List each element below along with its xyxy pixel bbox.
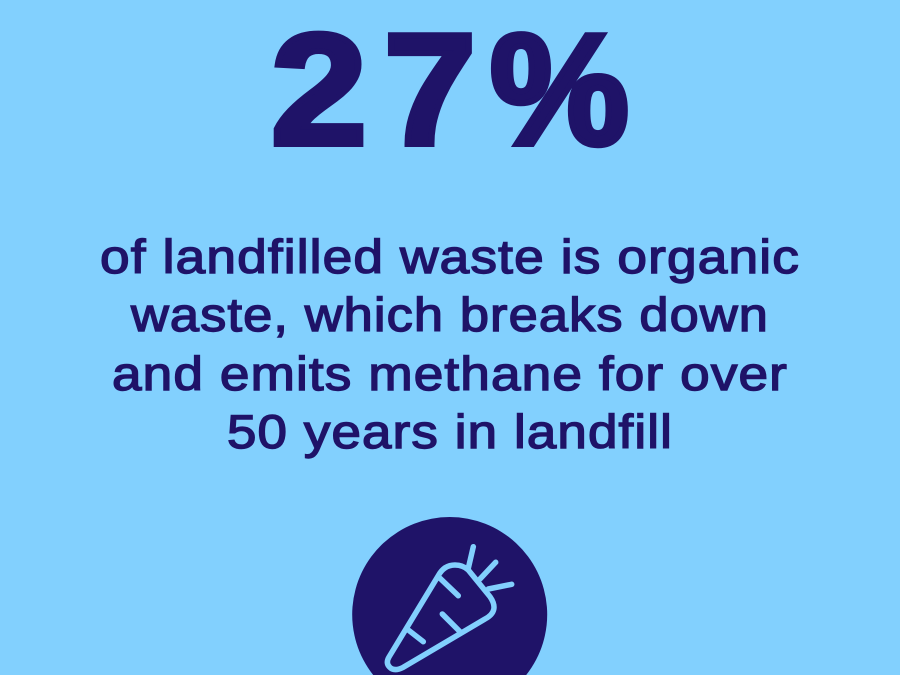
icon: carrot in circle (352, 517, 547, 675)
description text (100, 230, 800, 458)
big statistic: 27%: % (490, 2, 629, 178)
big statistic: 27%: 2 (271, 2, 367, 178)
description text: and emits methane for over (112, 347, 788, 400)
description text: of landfilled waste is organic (100, 230, 800, 283)
description text: waste, which breaks down (130, 288, 769, 341)
big statistic: 27% (271, 2, 629, 178)
description text: 50 years in landfill (227, 405, 673, 458)
big statistic: 27%: 7 (384, 2, 476, 178)
